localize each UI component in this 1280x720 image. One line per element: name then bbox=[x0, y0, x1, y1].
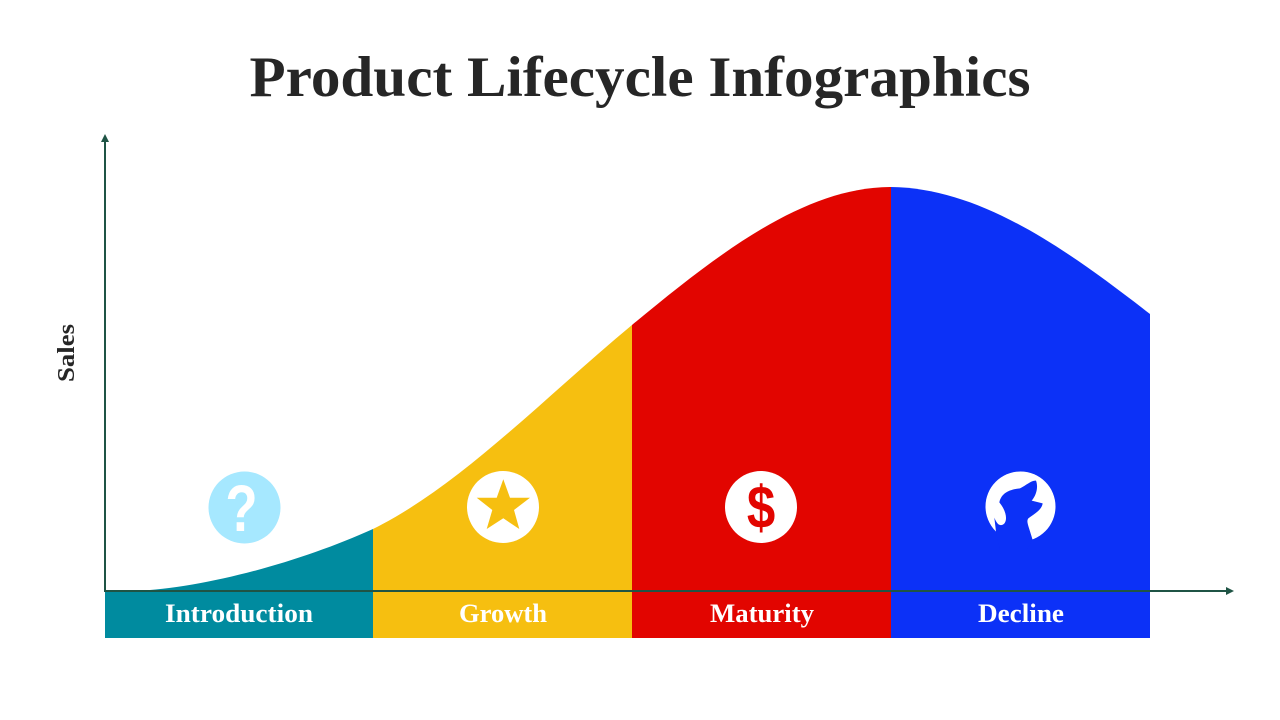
icon: dollar: $ bbox=[747, 474, 775, 541]
icon: howling wolf bbox=[986, 472, 1056, 550]
curve area: introduction bbox=[105, 529, 373, 638]
icon: star bbox=[467, 471, 539, 543]
curve area: decline bbox=[891, 187, 1150, 638]
icon: dollar bbox=[725, 471, 797, 543]
panel: decline bbox=[891, 187, 1150, 638]
label: maturity: Maturity bbox=[710, 599, 814, 628]
curve area: growth bbox=[373, 325, 632, 638]
y axis label: Sales bbox=[54, 324, 80, 382]
title: Product Lifecycle Infographics bbox=[250, 46, 1030, 109]
x axis arrow bbox=[104, 587, 1234, 595]
label: growth: Growth bbox=[459, 599, 548, 628]
label: introduction: Introduction bbox=[165, 599, 314, 628]
icon: question mark bbox=[208, 471, 280, 545]
y axis arrow bbox=[101, 134, 109, 591]
icon: question mark: ? bbox=[225, 471, 258, 545]
panel: growth bbox=[373, 325, 632, 638]
label: decline: Decline bbox=[978, 599, 1064, 628]
curve area: maturity bbox=[632, 187, 891, 638]
panel: maturity bbox=[632, 187, 891, 638]
panel: introduction bbox=[105, 471, 373, 638]
